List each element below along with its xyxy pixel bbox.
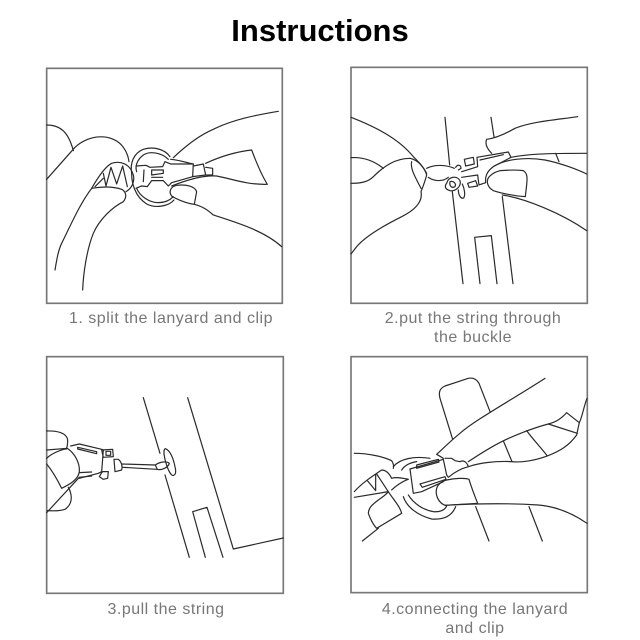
- panel 1: split the lanyard and clip: [47, 68, 282, 303]
- caption 4: 4.connecting the lanyard: [382, 601, 568, 618]
- buckle: [410, 458, 468, 477]
- strap: [143, 398, 283, 557]
- buckle: [464, 157, 474, 166]
- title: Instructions: [231, 13, 409, 48]
- strap: [439, 378, 490, 439]
- fingers: [47, 431, 68, 449]
- panel 3: pull the string: [47, 357, 283, 593]
- hand: [486, 117, 578, 153]
- loop and string: [427, 165, 454, 181]
- ring: [393, 457, 430, 470]
- ring: [131, 148, 174, 206]
- caption 4: [382, 601, 568, 637]
- buckle: [136, 162, 193, 188]
- caption 2: 2.put the string through: [385, 310, 561, 327]
- caption 4: and clip: [445, 620, 505, 637]
- left fingers: [354, 453, 394, 468]
- upper finger: [437, 378, 545, 458]
- caption 2: [385, 310, 561, 346]
- caption 3: 3.pull the string: [107, 601, 224, 618]
- panel 4: connecting the lanyard and clip: [351, 357, 587, 593]
- caption 2: the buckle: [434, 329, 512, 346]
- clip: [114, 459, 122, 472]
- panel 2: put the string through the buckle: [351, 67, 587, 303]
- disc and string: [164, 449, 176, 475]
- thumb: [436, 478, 478, 505]
- fingers: [173, 111, 278, 158]
- caption 1: 1. split the lanyard and clip: [69, 310, 273, 327]
- strap: [445, 117, 513, 284]
